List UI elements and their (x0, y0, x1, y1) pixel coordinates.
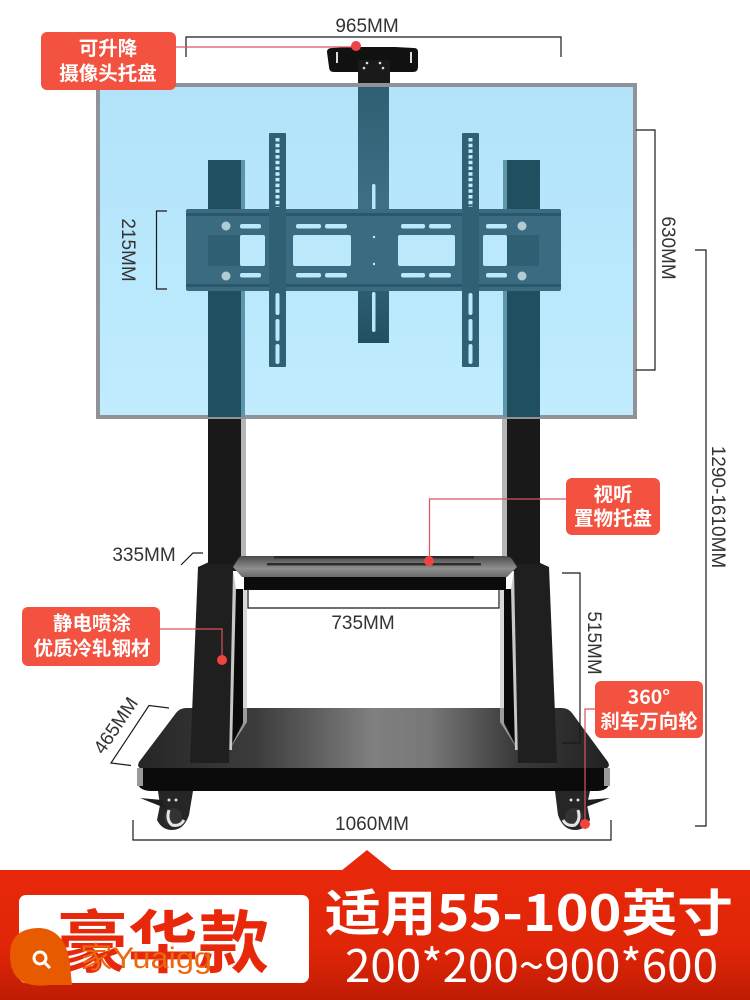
dimension: 1290-1610MM (695, 250, 728, 826)
dimension: 1290-1610MM: 1290-1610MM (707, 446, 728, 568)
dimension: 515MM: 515MM (583, 611, 604, 675)
dimension: 1060MM (133, 814, 611, 840)
callout: cold rolled steel: 优质冷轧钢材 (33, 632, 151, 661)
dimension: 965MM: 965MM (335, 16, 399, 37)
callout: AV shelf: 置物托盘 (574, 502, 652, 531)
right post (502, 419, 540, 564)
size headline: 适用55-100英寸 (325, 874, 733, 946)
dimension: 630MM: 630MM (657, 216, 678, 280)
callout: AV shelf: 视听 (593, 478, 633, 507)
dimension: 215MM (117, 211, 167, 289)
dimension: 335MM: 335MM (112, 545, 176, 566)
base plate (137, 708, 610, 791)
callout: brake casters (580, 681, 703, 829)
callout: camera tray: 可升降 (79, 32, 138, 61)
right vertical rail (462, 133, 479, 367)
dimension: 735MM (248, 589, 499, 634)
callout: AV shelf (424, 478, 660, 566)
TV screen outline with mount seen through (98, 85, 635, 417)
left caster (140, 791, 193, 830)
callout: camera tray (41, 32, 361, 90)
horizontal mount plate (186, 209, 561, 291)
model name box: 豪华款 (57, 888, 269, 987)
stand base and casters (137, 419, 610, 830)
left vertical rail (269, 133, 286, 367)
left column behind the screen (208, 160, 245, 417)
VESA range: 200*200~900*600 (345, 930, 718, 995)
dimension: 465MM (90, 694, 169, 766)
callout: cold rolled steel (22, 607, 227, 666)
dimension: 735MM: 735MM (331, 613, 395, 634)
callout: cold rolled steel: 静电喷涂 (53, 607, 131, 636)
watermark (10, 928, 212, 986)
dimension: 215MM: 215MM (117, 218, 138, 282)
right leg (500, 562, 557, 763)
callout: brake casters: 刹车万向轮 (600, 705, 698, 734)
TV screen (98, 85, 635, 417)
watermark: 家Yuaigg (80, 942, 212, 975)
dimension: 965MM (186, 16, 561, 57)
banner pointer (341, 850, 393, 871)
dimension: 335MM (112, 545, 203, 566)
left leg (190, 562, 247, 763)
callout: brake casters: 360° (628, 681, 670, 710)
dimension: 630MM (636, 130, 678, 370)
central lift column (358, 87, 389, 343)
dimension: 465MM: 465MM (90, 694, 143, 758)
banner background (0, 870, 750, 1000)
callout: camera tray: 摄像头托盘 (59, 57, 157, 86)
left post (208, 419, 246, 564)
bottom banner (0, 850, 750, 1000)
dimension: 1060MM: 1060MM (335, 814, 409, 835)
AV shelf tray (233, 556, 517, 590)
right caster (555, 791, 610, 830)
dimension: 515MM (562, 573, 604, 743)
right column behind the screen (503, 160, 540, 417)
camera tray (327, 47, 418, 84)
